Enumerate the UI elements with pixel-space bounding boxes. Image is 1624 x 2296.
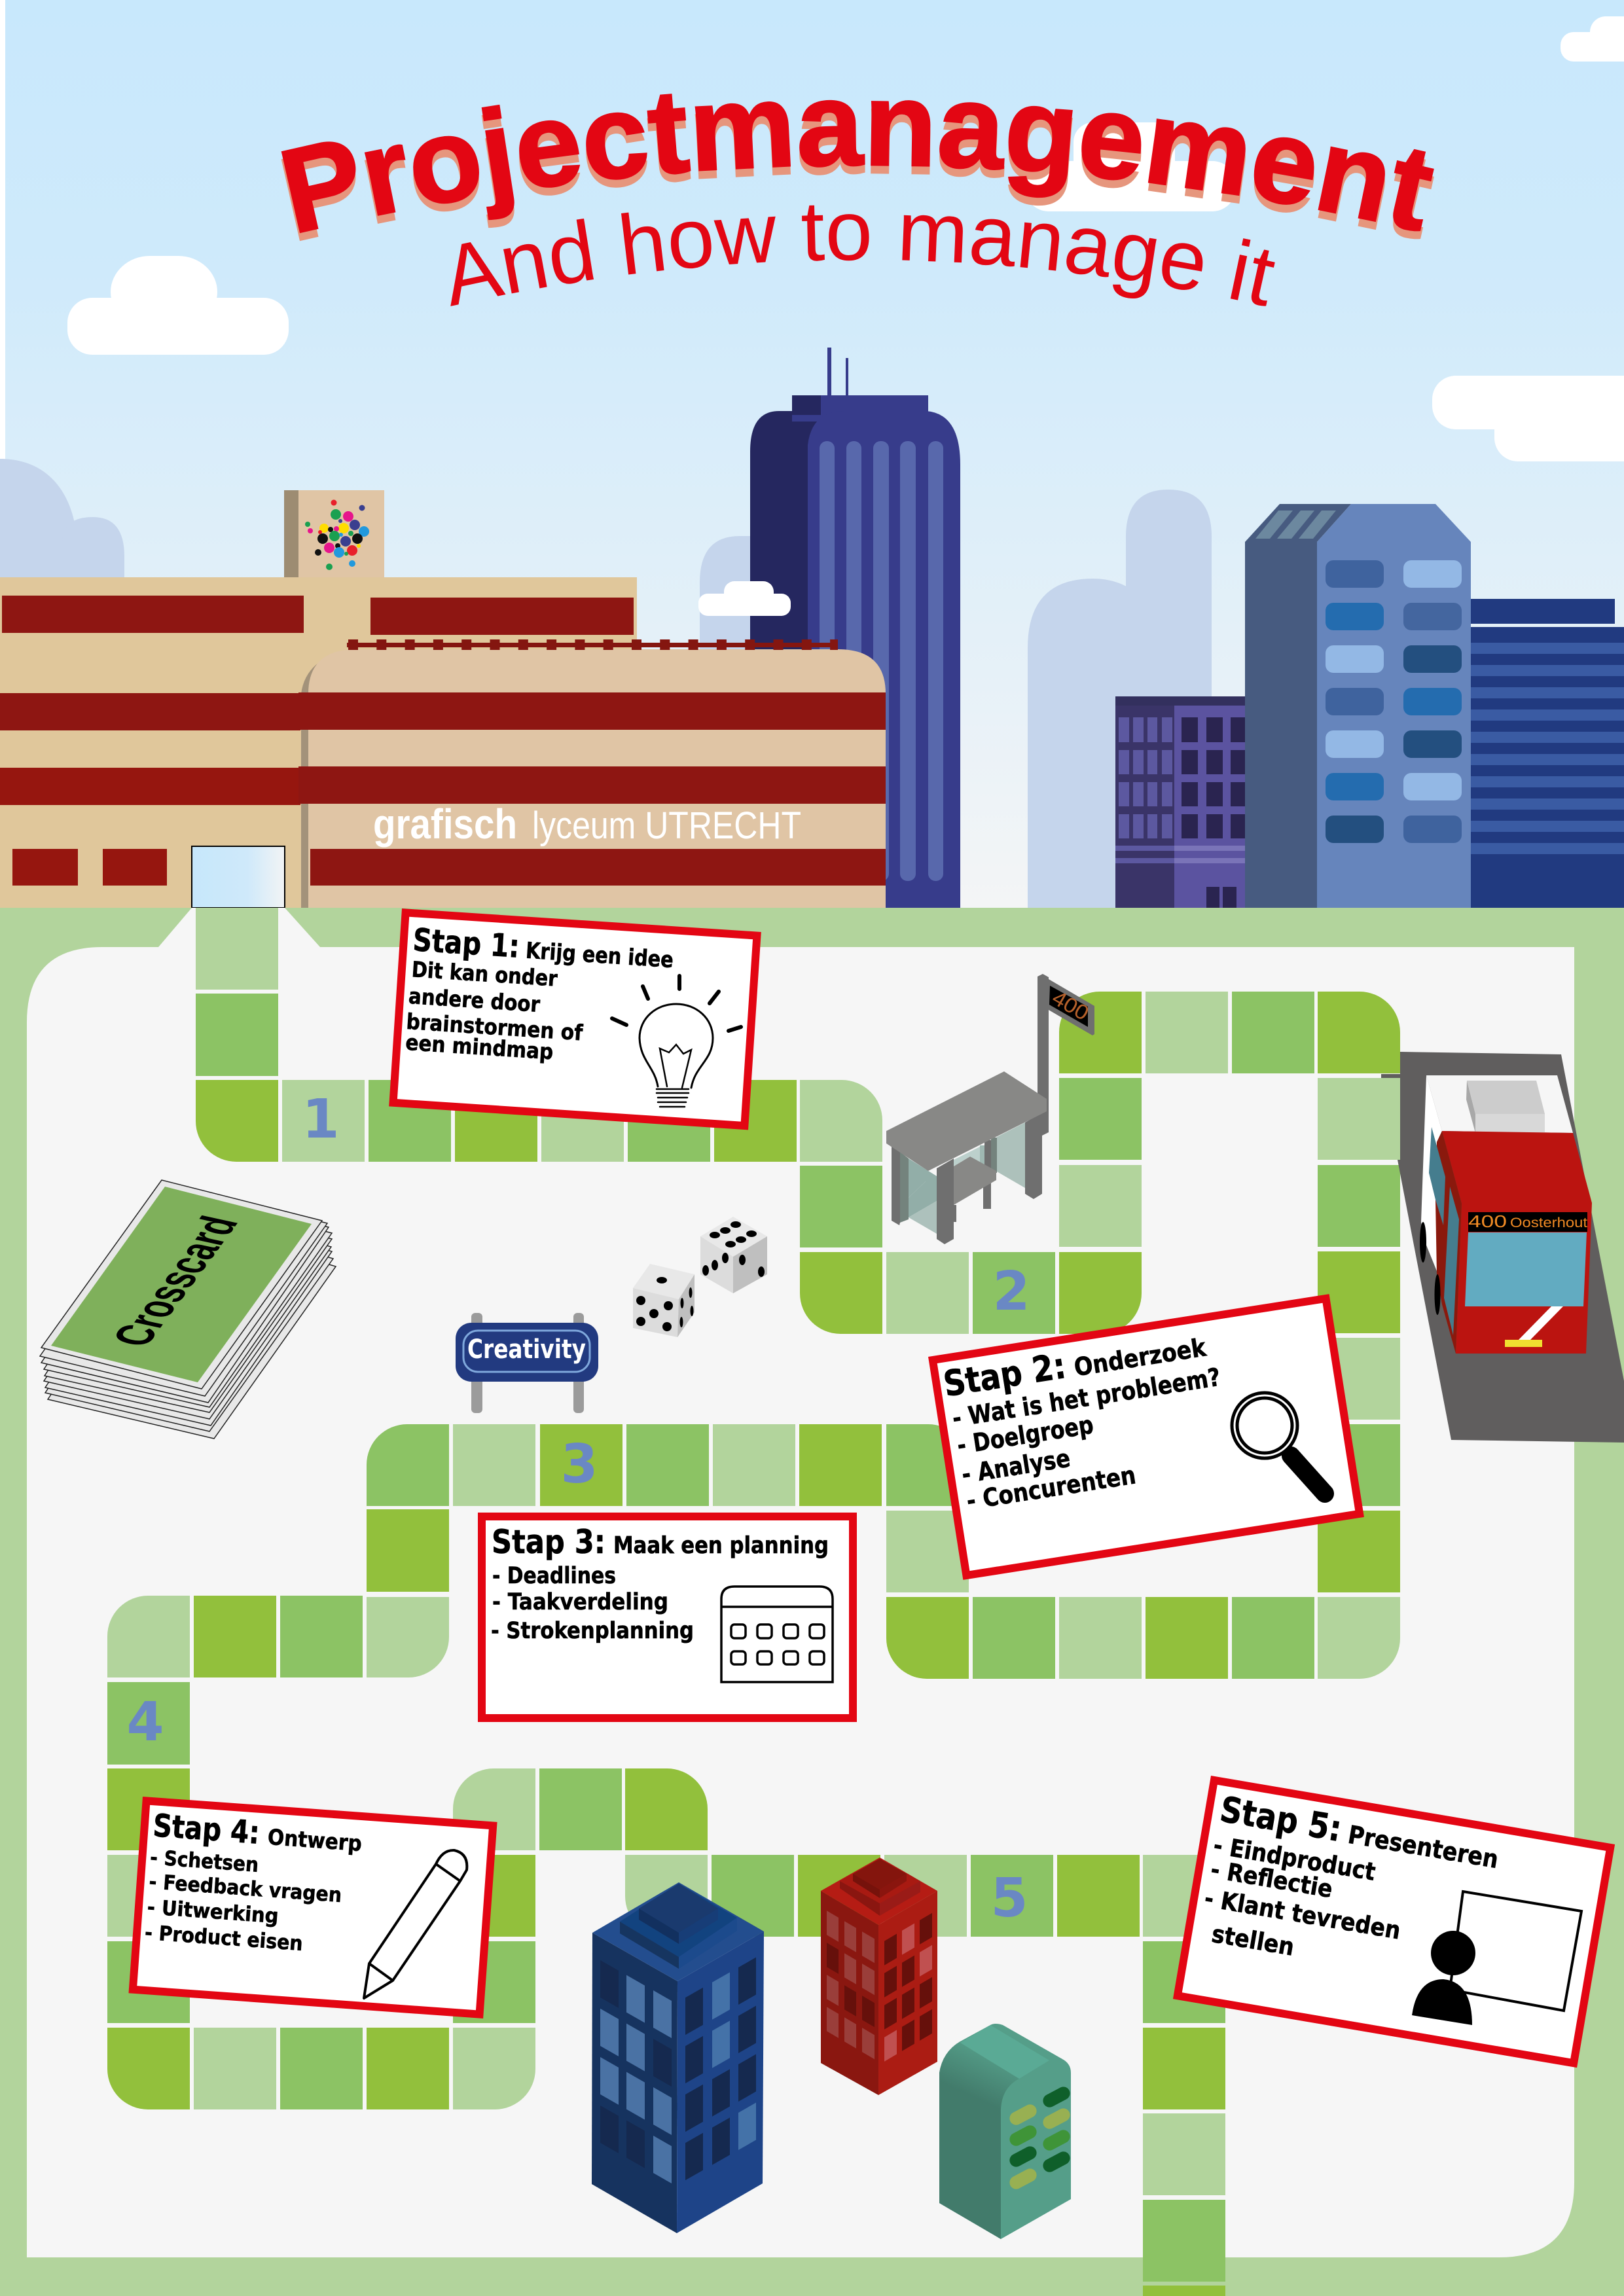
card: stap 3	[482, 1516, 853, 1718]
bus: Oosterhout	[1510, 1215, 1587, 1230]
railing	[347, 643, 838, 647]
card: stap 3: Stap 3:	[492, 1523, 605, 1561]
sky background	[5, 0, 1624, 910]
crosscard deck: Crosscard	[101, 1211, 250, 1351]
card: stap 5	[1178, 1780, 1610, 2063]
bus stop	[886, 974, 1094, 1244]
icon: pencil	[364, 1850, 467, 1998]
sign: creativity	[456, 1313, 598, 1413]
card: stap 3: - Taakverdeling	[492, 1589, 668, 1615]
purple building	[1115, 696, 1245, 908]
card: stap 4: Ontwerp	[267, 1824, 363, 1856]
sign: creativity: Creativity	[467, 1335, 586, 1365]
card: stap 5: Presenteren	[1346, 1820, 1500, 1874]
card: stap 4: - Schetsen	[149, 1846, 259, 1877]
card: stap 5: stellen	[1210, 1920, 1296, 1962]
school building: grafisch lyceum: lyceum UTRECHT	[532, 804, 801, 847]
card: stap 3: Maak een planning	[613, 1532, 829, 1559]
red isometric building	[821, 1857, 937, 2095]
card: stap 4	[133, 1801, 493, 2015]
board border	[0, 908, 1624, 2296]
card: stap 5: - Klant tevreden	[1202, 1884, 1403, 1945]
blue tower	[750, 348, 960, 908]
logo dots	[305, 500, 369, 570]
card: stap 2: Onderzoek	[1072, 1333, 1208, 1382]
card: stap 3: - Deadlines	[492, 1563, 616, 1589]
card: stap 2: - Doelgroep	[955, 1410, 1095, 1460]
die one	[633, 1264, 695, 1337]
card: stap 2: - Concurenten	[964, 1460, 1138, 1515]
board surface	[27, 908, 1574, 2257]
card: stap 2	[933, 1299, 1360, 1575]
bus stop: 400	[1049, 986, 1093, 1025]
card: stap 1: Stap 1:	[412, 922, 520, 965]
road	[1381, 1052, 1624, 1443]
card: stap 1: andere door	[408, 983, 541, 1017]
crosscard deck	[40, 1180, 336, 1439]
card: stap 4: Stap 4:	[152, 1807, 261, 1852]
front wing	[301, 649, 367, 908]
green isometric building	[939, 2024, 1072, 2239]
title: Projectmanagement	[281, 94, 1434, 233]
icon: lightbulb	[612, 976, 741, 1107]
door	[192, 846, 285, 908]
school building: grafisch lyceum	[0, 490, 886, 908]
card: stap 4: - Uitwerking	[147, 1895, 280, 1928]
small cloud	[698, 581, 791, 616]
clouds	[67, 16, 1624, 461]
card: stap 5: Stap 5:	[1217, 1789, 1344, 1850]
icon: magnifier	[1232, 1393, 1325, 1494]
dice	[633, 1217, 767, 1337]
school name: grafisch	[373, 800, 517, 848]
die two	[700, 1217, 767, 1293]
card: stap 2: - Analyse	[960, 1444, 1072, 1489]
card: stap 3: - Strokenplanning	[491, 1618, 694, 1644]
blue isometric building	[592, 1882, 764, 2233]
card: stap 5: - Eindproduct	[1212, 1831, 1377, 1886]
tile numbers: 4	[126, 1691, 164, 1753]
tile numbers	[126, 1088, 1030, 1929]
board path tiles	[107, 908, 1400, 2296]
tile numbers: 1	[302, 1088, 340, 1151]
card: stap 5: - Reflectie	[1208, 1855, 1335, 1903]
tile numbers: 2	[992, 1261, 1030, 1323]
card: stap 1: Dit kan onder	[411, 956, 558, 992]
right striped building	[1471, 599, 1624, 908]
blue office building	[1245, 504, 1471, 908]
bus: 400	[1468, 1211, 1507, 1231]
card: stap 2: Stap 2:	[941, 1345, 1068, 1405]
card: stap 1: brainstormen of	[405, 1009, 584, 1045]
title: Projectmanagement	[281, 109, 1434, 241]
card: stap 1	[393, 912, 757, 1126]
card: stap 1: een mindmap	[405, 1030, 554, 1065]
card: stap 4: - Feedback vragen	[148, 1870, 342, 1907]
distant skyline silhouettes	[0, 459, 1212, 908]
card: stap 1: Krijg een idee	[525, 938, 674, 973]
icon: presenter at board	[1412, 1892, 1581, 2025]
tile numbers: 5	[990, 1867, 1028, 1929]
card: stap 4: - Product eisen	[144, 1921, 304, 1956]
card: stap 2: - Wat is het probleem?	[950, 1363, 1222, 1433]
subtitle: And how to manage it	[450, 206, 1275, 306]
bus	[1420, 1075, 1592, 1354]
icon: calendar	[721, 1587, 833, 1682]
tile numbers: 3	[560, 1433, 598, 1496]
